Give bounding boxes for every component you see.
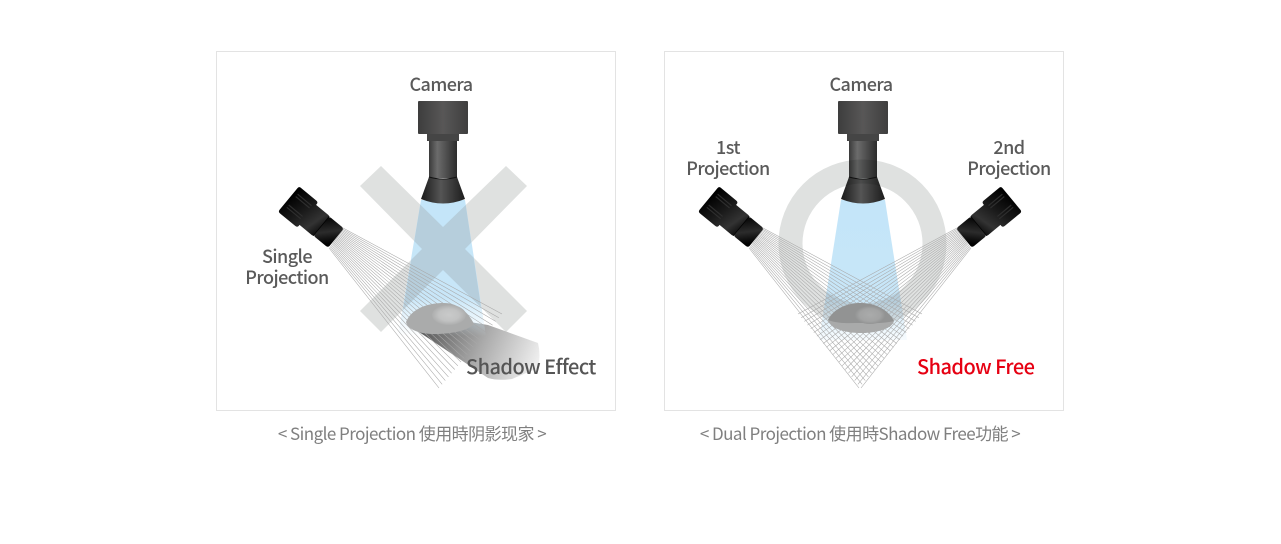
label: first projection: Projection — [686, 155, 770, 181]
projector — [278, 186, 346, 251]
cross and beam overlap — [403, 204, 481, 310]
second projection rays — [798, 228, 971, 388]
ring over camera — [846, 160, 878, 184]
camera — [838, 101, 888, 204]
label: second projection: 2nd — [993, 134, 1025, 160]
panel: single projection — [216, 52, 616, 410]
label: shadow effect: Shadow Effect — [466, 351, 596, 380]
caption: single projection: < Single Projection 使用時阴影现家 > — [278, 420, 546, 445]
first projection rays — [749, 228, 922, 388]
blue light beam — [398, 200, 486, 336]
ring and beam overlap — [822, 291, 904, 322]
label: shadow free: Shadow Free — [917, 351, 1035, 380]
blue light beam — [819, 200, 907, 340]
caption: dual projection: < Dual Projection 使用時Shadow Free功能 > — [700, 420, 1020, 445]
label: single projection: Projection — [245, 264, 329, 290]
ring mark — [790, 172, 934, 316]
label: single projection: Single — [262, 243, 312, 269]
first projector — [698, 186, 766, 251]
camera — [418, 101, 468, 204]
cross mark — [360, 166, 527, 332]
object dome — [828, 303, 894, 333]
label: camera: Camera — [829, 71, 893, 97]
panel: dual projection — [664, 52, 1064, 410]
label: camera: Camera — [409, 71, 473, 97]
shadow cast by object — [413, 322, 540, 380]
second projector — [954, 186, 1022, 251]
projection rays — [329, 228, 502, 388]
infographic — [216, 51, 1064, 444]
object dome — [406, 303, 474, 334]
label: second projection: Projection — [967, 155, 1051, 181]
label: first projection: 1st — [716, 134, 740, 160]
